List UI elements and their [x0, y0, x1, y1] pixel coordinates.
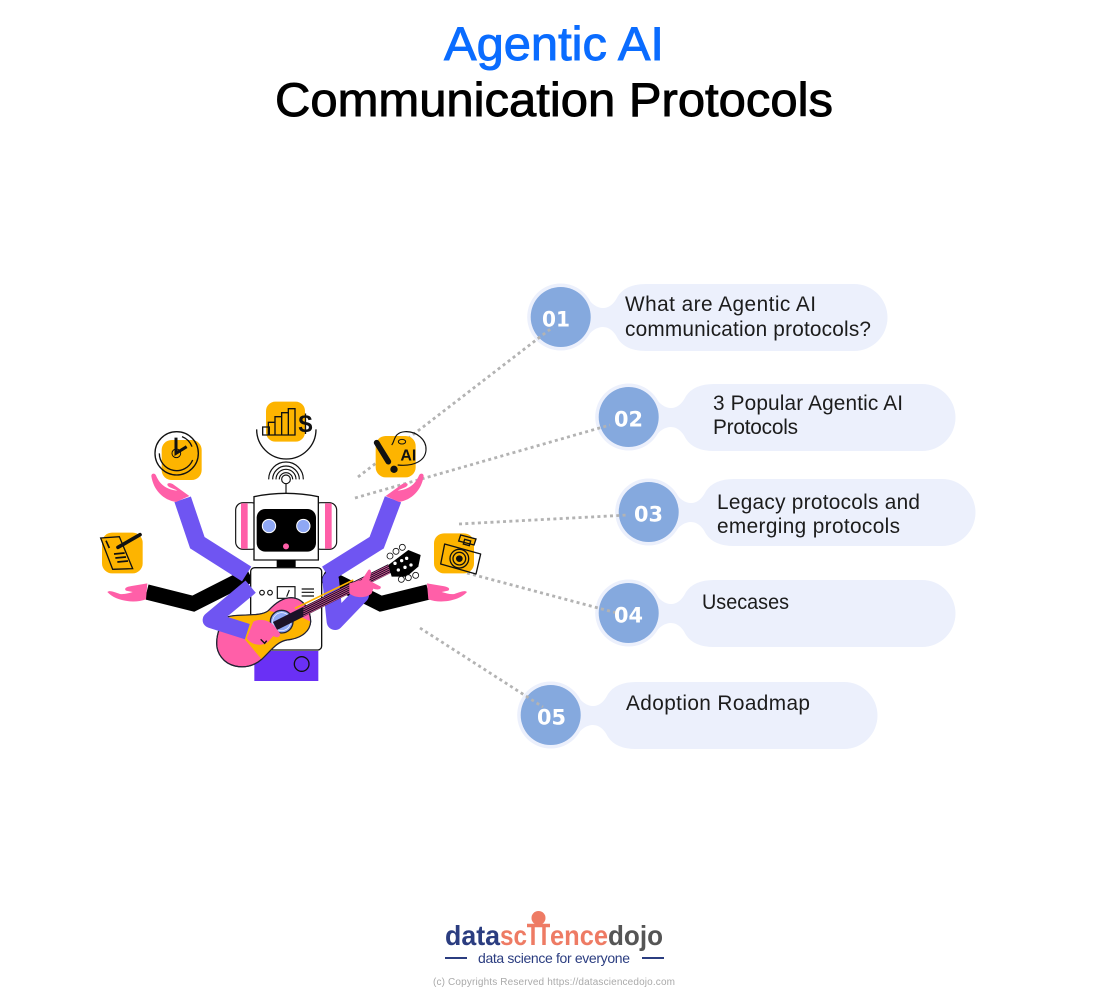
logo: data science dojo: sc — [500, 920, 527, 951]
upper purple arms — [183, 499, 393, 574]
item 04: 04 — [614, 604, 643, 628]
icon: clock — [155, 432, 202, 480]
item 05: Adoption Roadmap — [626, 692, 810, 715]
icon: notepad — [101, 533, 143, 573]
icon: AI palette: AI — [400, 447, 416, 464]
logo: data science dojo: ence — [550, 920, 608, 951]
item 03: 03 — [634, 502, 663, 526]
item 05: 05 — [537, 706, 566, 730]
logo: data science dojo: data science for everyone — [478, 950, 630, 966]
item 05 — [420, 628, 878, 749]
hands on guitar — [247, 570, 381, 645]
black arms — [147, 575, 428, 604]
robot body — [251, 568, 322, 650]
logo: data science dojo: dojo — [608, 920, 663, 951]
item 01: 01 — [542, 308, 570, 332]
item 03: Legacy protocols and — [717, 491, 920, 514]
item 02 — [355, 384, 956, 498]
logo: data science dojo — [445, 911, 664, 966]
item 02: Protocols — [713, 416, 798, 439]
lower left purple arm — [211, 587, 251, 632]
lower right purple arm — [331, 580, 361, 622]
title: Agentic AI — [444, 17, 664, 70]
item 01: communication protocols? — [625, 318, 871, 341]
item 04 — [467, 573, 956, 647]
item 02: 3 Popular Agentic AI — [713, 392, 903, 415]
antenna signal — [269, 462, 303, 495]
copyright line: (c) Copyrights Reserved https://datasciencedojo.com — [433, 977, 675, 988]
robot head — [236, 493, 337, 568]
icon: revenue chart: $ — [298, 410, 312, 438]
robot illustration — [101, 402, 481, 681]
title — [275, 17, 833, 126]
item 01: What are Agentic AI — [625, 293, 816, 316]
logo: data science dojo: data — [445, 920, 500, 951]
item 03: emerging protocols — [717, 515, 900, 538]
icon: revenue chart — [257, 402, 316, 459]
guitar — [217, 544, 421, 667]
icon: AI palette — [376, 432, 426, 477]
item 02: 02 — [614, 408, 643, 432]
hands: pink — [107, 474, 467, 601]
title: Communication Protocols — [275, 73, 833, 126]
item 04: Usecases — [702, 591, 789, 614]
item 01 — [358, 284, 888, 477]
robot base — [254, 651, 318, 681]
item 03 — [459, 478, 976, 546]
icon: camera — [434, 533, 481, 574]
